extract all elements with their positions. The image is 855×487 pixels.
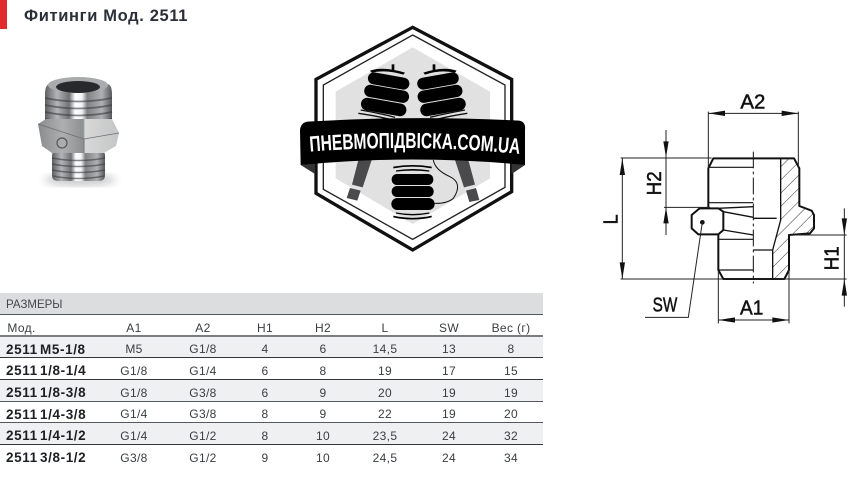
dimension arrows [620,111,847,323]
row 2511 1/8-3/8: 9 [319,386,327,400]
row 2511 M5-1/8: 14,5 [373,342,397,356]
left upper air bellow [360,64,410,117]
row 2511 1/8-3/8 [0,380,543,402]
row 2511 1/4-1/2: 2511 1/4-1/2 [6,428,86,442]
row 2511 M5-1/8 [0,337,543,358]
row 2511 1/8-1/4: 8 [319,364,327,378]
row 2511 1/4-1/2: 8 [261,428,269,442]
row 2511 3/8-1/2: 34 [504,450,518,464]
row 2511 3/8-1/2: G3/8 [120,450,148,464]
column headers: A1 [126,320,142,334]
row 2511 1/4-3/8: 20 [504,406,518,420]
column headers [0,315,543,337]
dimension labels: L [600,214,623,224]
row 2511 3/8-1/2: 24 [442,450,456,464]
column headers: Вес (г) [492,320,530,334]
fitting outline [692,152,814,283]
logo: пневмопідвіска.com.ua hexagon badge [300,26,526,252]
row 2511 1/8-3/8: 6 [261,386,269,400]
row 2511 1/8-3/8: 19 [442,386,456,400]
banner ribbon: ПНЕВМОПІДВІСКА.COM.UA [310,132,520,154]
row 2511 3/8-1/2: 2511 3/8-1/2 [6,450,86,464]
row 2511 1/4-3/8 [0,402,543,423]
row 2511 M5-1/8: G1/8 [189,342,217,356]
row 2511 3/8-1/2 [6,450,518,464]
dimension lines [621,112,847,323]
dimension labels: H1 [820,246,843,270]
row 2511 M5-1/8: 6 [319,342,327,356]
row 2511 1/8-1/4: 19 [378,364,392,378]
dimension labels: SW [653,294,678,317]
row 2511 1/8-1/4: 17 [442,364,456,378]
sizes table [0,293,543,464]
right upper air bellow [416,64,467,117]
hatched section [773,159,814,279]
row 2511 1/8-3/8: 20 [378,386,392,400]
column headers: A2 [195,320,211,334]
row 2511 1/4-1/2: 10 [316,428,330,442]
row 2511 1/4-3/8: 19 [442,406,456,420]
banner ribbon [300,118,526,174]
row 2511 3/8-1/2: 9 [261,450,269,464]
row 2511 1/8-1/4 [0,358,543,380]
row 2511 1/8-1/4: 6 [261,364,269,378]
lower air bellow [391,165,435,220]
table heading bar [0,293,543,315]
column headers: SW [439,320,459,334]
column headers: L [381,320,389,334]
table heading bar: РАЗМЕРЫ [6,299,62,311]
row 2511 1/8-1/4: 2511 1/8-1/4 [6,362,86,378]
row 2511 3/8-1/2: 24,5 [373,450,397,464]
row 2511 M5-1/8: 13 [442,342,456,356]
shock absorbers and air line [347,110,479,203]
title: Фитинги Мод. 2511 [24,7,188,25]
row 2511 M5-1/8: M5 [125,342,143,356]
row 2511 M5-1/8: 2511 M5-1/8 [6,342,86,356]
dimension labels [600,90,843,319]
dimension labels: H2 [643,171,666,195]
row 2511 1/4-3/8: 8 [261,406,269,420]
row 2511 1/4-1/2: G1/4 [120,428,148,442]
red accent bar [0,0,7,29]
lower thread [52,150,105,181]
row 2511 1/4-3/8: 9 [319,406,327,420]
row 2511 1/8-1/4: G1/4 [189,364,217,378]
row 2511 3/8-1/2: G1/2 [189,450,217,464]
row 2511 1/4-1/2 [0,423,543,445]
upper thread [45,84,112,124]
row 2511 1/4-3/8: 22 [378,406,392,420]
row 2511 M5-1/8: 4 [261,342,269,356]
row 2511 1/4-3/8: G1/4 [120,406,148,420]
technical drawing of fitting with dimensions [600,90,847,324]
row 2511 3/8-1/2: 10 [316,450,330,464]
row 2511 1/4-3/8: 2511 1/4-3/8 [6,406,86,422]
row 2511 1/4-3/8: G3/8 [189,406,217,420]
row 2511 1/8-3/8: 2511 1/8-3/8 [6,384,86,400]
row 2511 1/4-1/2: 23,5 [373,428,397,442]
row 2511 1/4-1/2: 32 [504,428,518,442]
row 2511 1/4-1/2: G1/2 [189,428,217,442]
dimension labels: A2 [740,90,765,113]
row 2511 M5-1/8: 8 [507,342,515,356]
row 2511 1/8-1/4: 15 [504,364,518,378]
column headers: Мод. [7,320,36,334]
column headers: H1 [257,320,273,334]
row 2511 1/8-3/8: 19 [504,386,518,400]
column headers: H2 [315,320,331,334]
row 2511 1/4-1/2: 24 [442,428,456,442]
hexagon [38,119,119,153]
row 2511 1/8-3/8: G1/8 [120,386,148,400]
row 2511 1/8-1/4: G1/8 [120,364,148,378]
dimension labels: A1 [740,296,763,319]
product photo: chrome fitting [38,77,119,188]
row 2511 1/8-3/8: G3/8 [189,386,217,400]
